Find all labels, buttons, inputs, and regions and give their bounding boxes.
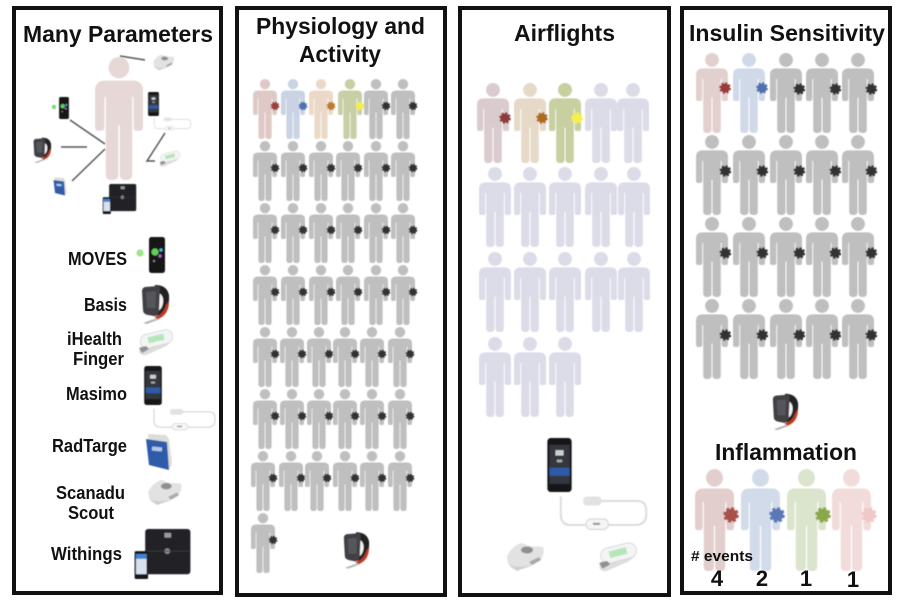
connector lines <box>61 56 165 181</box>
icon: masimo cable <box>154 409 215 430</box>
icon: masimo cable <box>561 496 646 530</box>
icon: green dot <box>136 249 144 257</box>
icon: moves phone small <box>59 97 69 119</box>
label: Scanadu Scout <box>56 483 125 523</box>
icon: cable small <box>154 118 191 130</box>
gray participants <box>696 53 876 379</box>
panel: many parameters <box>14 8 221 593</box>
icon: masimo phone <box>144 366 162 405</box>
panel: airflights <box>460 8 669 595</box>
icon: scanadu <box>507 543 544 571</box>
gray participants <box>251 79 417 573</box>
icon: oximeter <box>599 541 638 571</box>
icon: body figure <box>95 57 143 180</box>
label: iHealth Finger: iHealth <box>67 329 122 349</box>
heading: inflammation: Inflammation <box>715 439 857 465</box>
device label: MOVES: MOVES <box>68 249 127 269</box>
heading: physiology and activity <box>256 13 425 67</box>
icon: radtarge small <box>54 178 66 196</box>
label: Basis: Basis <box>84 295 127 315</box>
label: RadTarge: RadTarge <box>52 436 127 456</box>
icon: masimo phone small <box>148 92 159 116</box>
icon: watch small <box>34 138 51 163</box>
icon: scanadu on head <box>153 55 174 70</box>
label: Scanadu Scout: Scanadu <box>56 483 125 503</box>
icon: scale small <box>103 184 136 214</box>
icon: masimo phone <box>547 438 572 492</box>
pictogram: participants <box>251 79 417 573</box>
icon: watch <box>773 394 798 430</box>
icon: withings scale <box>135 529 190 579</box>
icon: scanadu <box>148 480 181 505</box>
label: Withings: Withings <box>51 544 122 564</box>
icon: oximeter small <box>160 150 181 167</box>
device icons list <box>135 237 215 579</box>
icon: green dot small <box>52 105 56 109</box>
label: number of events: # events <box>691 548 753 565</box>
label: iHealth Finger <box>67 329 124 369</box>
value: 1 event: 1 <box>800 566 812 591</box>
diagram: person with connected sensors <box>34 55 191 214</box>
icon: moves phone <box>149 237 165 273</box>
heading: airflights: Airflights <box>514 20 615 46</box>
icon: radtarge <box>146 434 172 470</box>
icon: basis watch <box>142 285 169 324</box>
lavender participants <box>479 83 650 417</box>
pictogram: insulin participants <box>696 53 876 430</box>
pictogram: inflammation participants <box>695 469 876 571</box>
value: 2 events: 2 <box>756 566 768 591</box>
icon: ihealth oximeter <box>139 328 174 355</box>
value: 1 event: 1 <box>847 567 859 592</box>
value: 4 events: 4 <box>711 566 724 591</box>
colored participants <box>477 83 582 163</box>
label: Masimo: Masimo <box>66 384 127 404</box>
colored participants <box>696 53 767 133</box>
heading: physiology and activity: Activity <box>299 41 381 67</box>
label: Scanadu Scout: Scout <box>68 503 114 523</box>
colored participants <box>253 79 364 139</box>
panel: insulin sensitivity and inflammation <box>682 8 890 593</box>
heading: physiology and activity: Physiology and <box>256 13 425 39</box>
label: iHealth Finger: Finger <box>73 349 124 369</box>
pictogram: participants <box>477 83 650 571</box>
heading: many parameters: Many Parameters <box>23 21 213 47</box>
panel: physiology and activity <box>237 8 445 595</box>
icon: watch <box>344 532 369 569</box>
heading: insulin sensitivity: Insulin Sensitivity <box>689 20 885 46</box>
